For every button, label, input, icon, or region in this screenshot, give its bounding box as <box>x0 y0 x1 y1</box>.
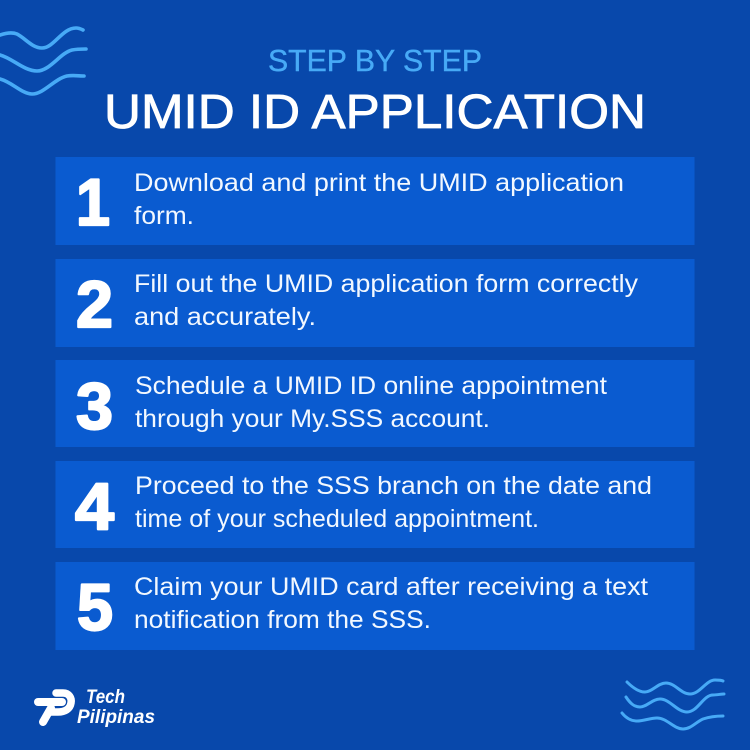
step 2 text: and accurately. <box>134 303 316 331</box>
step 4 text: time of your scheduled appointment. <box>135 505 539 533</box>
number 5: 5 <box>77 570 113 644</box>
step 5 text: Claim your UMID card after receiving a text <box>134 573 648 601</box>
panel: step 5 <box>56 562 694 650</box>
number 2: 2 <box>76 267 113 341</box>
number 4: 4 <box>75 469 114 543</box>
panel: step 2 <box>56 259 694 347</box>
title: UMID ID APPLICATION <box>104 86 646 139</box>
panel: step 4 <box>56 461 694 548</box>
icon: waves top left <box>0 28 86 94</box>
number 3: 3 <box>76 369 113 443</box>
icon: waves bottom right <box>622 680 724 729</box>
logo wordmark: Tech <box>86 687 125 708</box>
number 1: 1 <box>76 165 110 239</box>
logo: Tech Pilipinas <box>38 687 155 728</box>
step 1 text: Download and print the UMID application <box>134 169 624 197</box>
icon: P mark <box>38 693 71 722</box>
heading: step by step: STEP BY STEP <box>268 43 482 78</box>
panel: step 1 <box>56 157 694 245</box>
step 5 text: notification from the SSS. <box>134 606 431 634</box>
step 3 text: through your My.SSS account. <box>135 405 490 433</box>
step 1 text: form. <box>134 202 194 230</box>
panel: step 3 <box>56 360 694 447</box>
step 2 text: Fill out the UMID application form correctly <box>134 270 639 298</box>
logo wordmark: Pilipinas <box>77 707 155 728</box>
step 3 text: Schedule a UMID ID online appointment <box>135 372 607 400</box>
step 4 text: Proceed to the SSS branch on the date and <box>135 472 652 500</box>
